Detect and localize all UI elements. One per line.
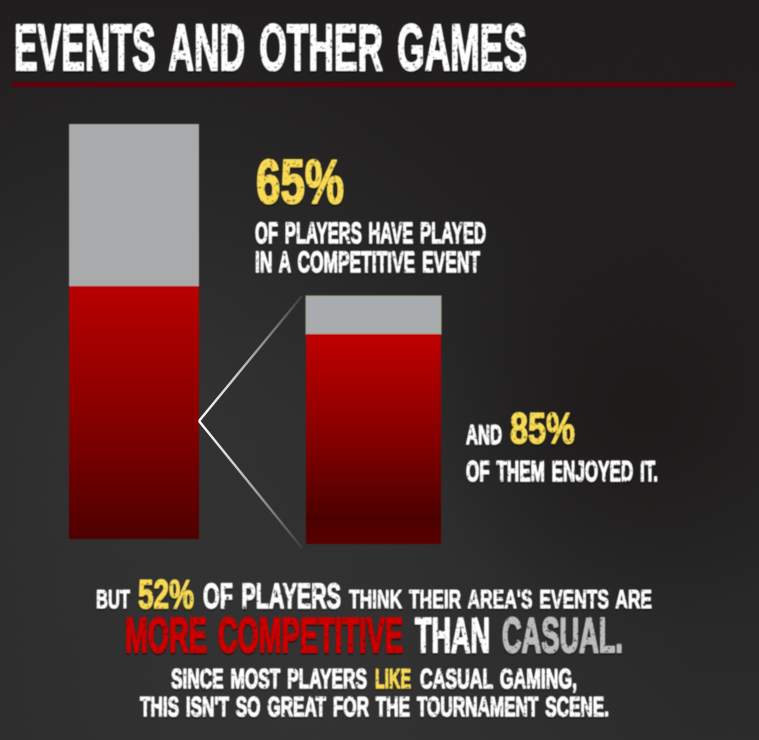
number: 65%: 65% — [256, 148, 344, 217]
label: in a competitive event: IN A COMPETITIVE EVENT — [255, 246, 480, 279]
line: 52% of players — [96, 571, 652, 617]
line: more competitive than casual: MORE COMPETITIVE — [125, 609, 403, 663]
label: and: AND — [466, 419, 502, 450]
line: since most players like casual gaming: SINCE MOST PLAYERS — [171, 663, 367, 694]
label: of players have played: OF PLAYERS HAVE PLAYED — [255, 217, 486, 250]
line: more competitive than casual: THAN — [415, 609, 490, 663]
line: 52% of players: OF PLAYERS — [203, 577, 341, 616]
line: 52% of players: 52% — [138, 571, 194, 617]
line: since most players like casual gaming: CASUAL GAMING, — [420, 663, 577, 694]
title underline — [12, 82, 735, 87]
line: 52% of players: BUT — [96, 584, 130, 614]
number: 85%: 85% — [510, 404, 575, 453]
stat: 65% of players — [255, 148, 486, 279]
bar: all players, 65% competed — [69, 124, 199, 539]
bar: competitors, 85% enjoyed — [306, 296, 441, 544]
conclusion text — [96, 571, 652, 722]
chevron connector — [199, 296, 302, 548]
line: since most players like casual gaming: LIKE — [375, 663, 411, 694]
line: more competitive than casual: CASUAL. — [502, 609, 623, 663]
stat: 85% enjoyed — [466, 404, 658, 488]
